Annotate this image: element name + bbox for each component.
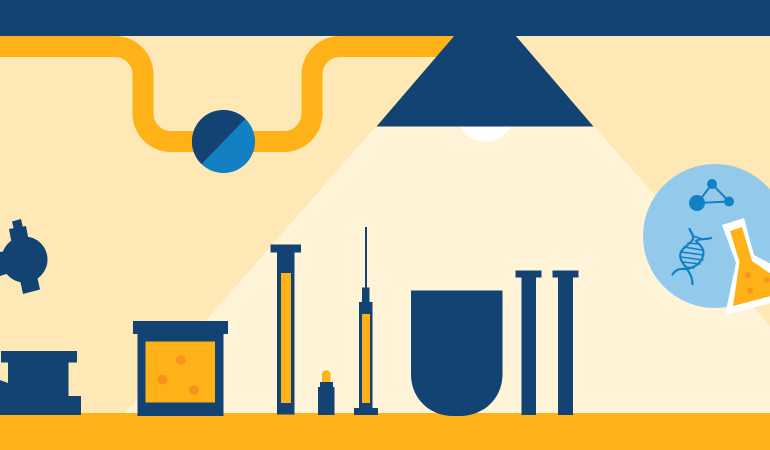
icon: DNA bbox=[672, 229, 711, 284]
ceiling bar bbox=[0, 0, 770, 36]
syringe bbox=[354, 227, 378, 415]
microscope bbox=[0, 219, 81, 415]
jar with liquid bbox=[133, 321, 228, 416]
test tube right bbox=[552, 270, 578, 415]
icon: flask bbox=[722, 218, 770, 315]
icon: molecule bbox=[689, 179, 734, 211]
light bulb bbox=[457, 85, 514, 142]
test tube left bbox=[516, 270, 542, 415]
floor bbox=[0, 413, 770, 450]
yellow pipe bbox=[0, 46, 460, 142]
dropper bottle bbox=[318, 370, 334, 415]
lamp shade bbox=[376, 35, 594, 126]
science badge circle bbox=[643, 164, 770, 308]
pipe valve bbox=[192, 110, 255, 173]
beaker bbox=[411, 290, 502, 416]
light cone bbox=[124, 126, 770, 414]
graduated cylinder bbox=[270, 244, 301, 414]
